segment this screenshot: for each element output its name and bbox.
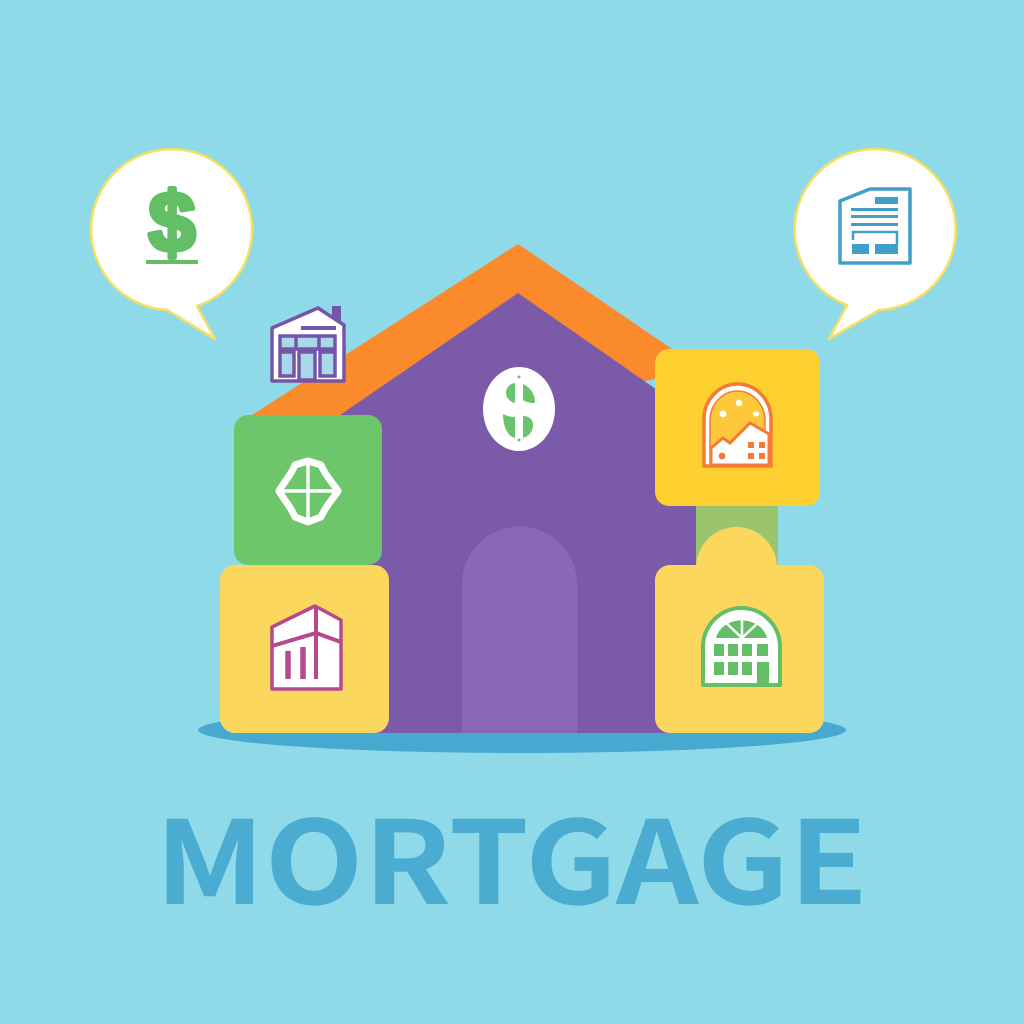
green connector strip bbox=[696, 500, 778, 570]
callout: dollar bubble bbox=[91, 149, 252, 339]
panel: green tile bbox=[234, 415, 382, 565]
door bbox=[462, 526, 577, 733]
panel: yellow tile with dome bbox=[655, 527, 824, 733]
icon: small purple house bbox=[272, 306, 344, 381]
house body bbox=[340, 293, 696, 733]
icon: building bbox=[272, 606, 341, 689]
callout: document bubble bbox=[795, 149, 956, 339]
orange roof bbox=[252, 244, 700, 440]
house illustration bbox=[252, 244, 700, 733]
ground shadow bbox=[198, 707, 846, 753]
panel: bright yellow tile bbox=[655, 349, 820, 506]
icon: dollar sign: $ bbox=[149, 175, 195, 269]
panel: yellow tile with building bbox=[220, 565, 389, 733]
icon: globe bbox=[279, 461, 338, 522]
icon: document bbox=[840, 189, 910, 263]
dollar medallion bbox=[483, 367, 555, 451]
title: MORTGAGE bbox=[155, 772, 868, 938]
icon: arched green window bbox=[703, 608, 780, 685]
icon: arched window with skyline bbox=[704, 384, 771, 466]
